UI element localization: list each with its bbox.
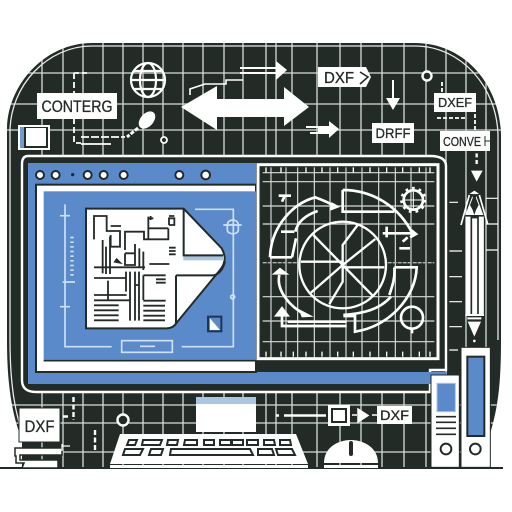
label: DXEF: DXEF <box>438 95 472 110</box>
centre circle with spokes <box>299 222 386 308</box>
arrow: down arrow <box>386 80 400 110</box>
label: DXF bottom right: DXF <box>380 408 409 423</box>
icon: DXF book stack <box>15 408 70 468</box>
ticks <box>266 167 430 357</box>
icon: pencil <box>449 153 498 350</box>
label: CONVE <box>440 131 490 151</box>
icon: mouse <box>324 440 378 468</box>
arrow: to DXF <box>352 409 377 422</box>
left binder <box>431 375 459 467</box>
panel: right CAD drawing <box>258 165 438 359</box>
baseline <box>0 467 503 469</box>
icon: keyboard <box>110 434 308 468</box>
label: CONVE: CONVE <box>443 134 481 149</box>
icon: small gear <box>161 137 167 143</box>
icon: window <box>18 125 50 150</box>
icon: globe <box>131 63 165 97</box>
drawing frame and grid <box>258 165 438 359</box>
panel: left CAD window <box>36 171 256 372</box>
icon: small document <box>208 317 221 331</box>
label: DXF bottom right <box>377 406 412 424</box>
arrow: top right arrow <box>190 61 287 95</box>
blueprint guide lines <box>60 204 242 352</box>
arrow: lower right arrow <box>306 121 339 138</box>
arrow: large double arrow <box>181 86 309 130</box>
dashed connector <box>63 397 95 452</box>
icon: DXF book stack: DXF <box>24 417 54 436</box>
icon: gear <box>402 188 425 212</box>
window frame <box>36 185 256 372</box>
document sheet <box>86 209 225 328</box>
icon: monitor stand <box>196 397 256 432</box>
label: DXEF <box>434 93 476 112</box>
label: CONTERG: CONTERG <box>42 98 112 116</box>
circular arrows <box>270 190 423 333</box>
label: DXF tag <box>318 67 371 87</box>
icon: pen <box>127 108 159 137</box>
icon: ring node <box>118 414 128 426</box>
icon: binders <box>431 347 490 467</box>
label: CONTERG <box>37 93 117 119</box>
panel: monitor frame <box>22 156 446 392</box>
icon: dashed connector lines <box>74 73 125 144</box>
icon: square node <box>276 405 350 426</box>
label: DRFF: DRFF <box>376 125 410 141</box>
right binder <box>461 347 490 467</box>
label: DXF tag: DXF <box>324 70 354 87</box>
dashed connectors near labels <box>437 82 475 130</box>
icon: ring node <box>422 72 432 80</box>
window control dots <box>36 171 210 179</box>
